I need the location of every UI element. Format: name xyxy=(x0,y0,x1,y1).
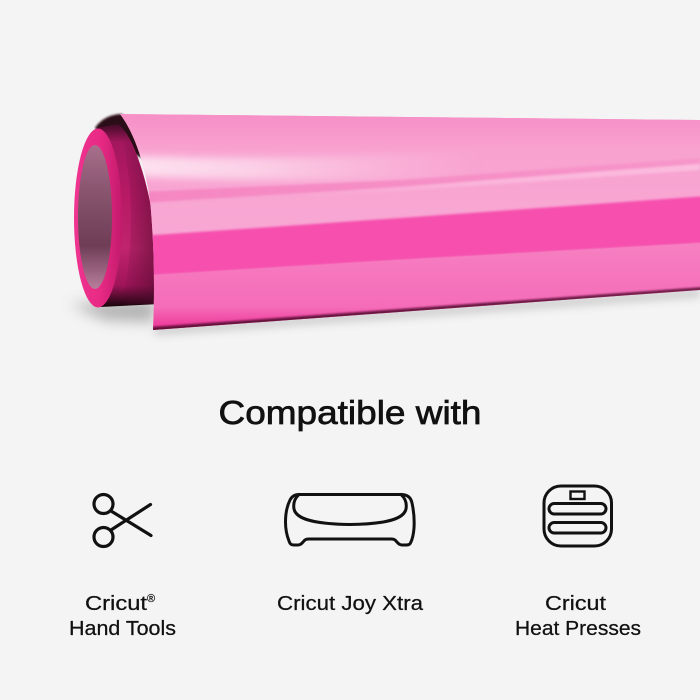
label: Cricut Heat Presses xyxy=(515,593,641,640)
lower band xyxy=(140,242,700,335)
label: Cricut Hand Tools: ® xyxy=(147,593,155,605)
roll body xyxy=(97,124,160,307)
label: Cricut Hand Tools xyxy=(69,593,176,640)
sheen highlight xyxy=(139,152,422,183)
label: Cricut Hand Tools: Cricut xyxy=(85,593,148,615)
vinyl roll xyxy=(70,100,700,340)
sheet ground shadow xyxy=(155,288,700,336)
infographic canvas xyxy=(70,112,700,636)
roll hollow core xyxy=(78,145,112,289)
sheet upper band xyxy=(100,112,700,240)
bottom edge xyxy=(140,286,700,332)
label: Cricut Joy Xtra: Cricut Joy Xtra xyxy=(277,593,424,615)
icon: Cricut heat press xyxy=(544,486,612,546)
back flap xyxy=(95,114,146,160)
label: Cricut Hand Tools: Hand Tools xyxy=(69,618,176,640)
vinyl sheet xyxy=(120,114,700,330)
dark band xyxy=(140,195,700,276)
label: Cricut Heat Presses: Cricut xyxy=(545,593,607,615)
title: Compatible with xyxy=(218,394,482,431)
body shading xyxy=(120,130,160,304)
label: Cricut Heat Presses: Heat Presses xyxy=(515,618,641,640)
crease band xyxy=(140,158,700,203)
icon: Cricut Joy Xtra machine xyxy=(286,494,414,545)
icon: scissors xyxy=(94,494,151,546)
roll rim xyxy=(74,128,122,308)
roll shadow xyxy=(70,300,155,322)
light ridge xyxy=(391,164,700,190)
